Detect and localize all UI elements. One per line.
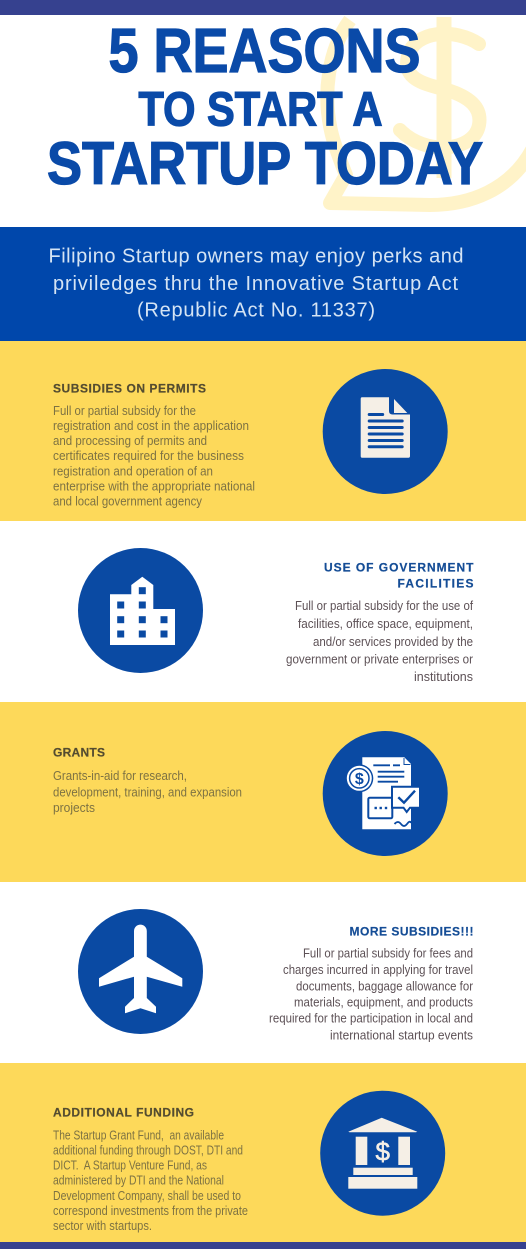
body text: additional funding xyxy=(53,1128,248,1233)
body text: additional funding: administered by DTI and the National xyxy=(53,1174,224,1188)
body text: subsidies on permits: certificates required for the business xyxy=(53,448,244,463)
body text: more subsidies: documents, baggage allowance for xyxy=(296,978,474,993)
body text: subsidies on permits xyxy=(53,403,255,508)
body text: additional funding: sector with startups. xyxy=(53,1219,152,1233)
title panel xyxy=(0,15,526,227)
body text: subsidies on permits: registration and cost in the application xyxy=(53,418,249,433)
panel: more subsidies xyxy=(0,882,526,1063)
body text: additional funding: correspond investments from the private xyxy=(53,1204,248,1218)
decorative dollar coin icon xyxy=(327,17,526,205)
heading: use of government facilities: USE OF GOVERNMENT xyxy=(324,560,474,574)
body text: subsidies on permits: enterprise with the appropriate national xyxy=(53,478,255,494)
subtitle text: (Republic Act No. 11337) xyxy=(137,300,375,322)
heading: use of government facilities xyxy=(324,560,474,590)
bottom band xyxy=(0,1242,526,1249)
panel: additional funding xyxy=(0,1063,526,1242)
body text: subsidies on permits: and local government agency xyxy=(53,494,202,508)
icon: bank xyxy=(320,1091,445,1216)
title: 5 REASONS xyxy=(108,17,420,86)
body text: additional funding: DICT. A Startup Venture Fund, as xyxy=(53,1159,207,1173)
body text: additional funding: additional funding through DOST, DTI and xyxy=(53,1143,243,1157)
title: TO START A xyxy=(138,84,382,136)
body text: use of government facilities: facilities, office space, equipment, xyxy=(298,616,473,631)
body text: additional funding: Development Company, shall be used to xyxy=(53,1189,241,1203)
body text: grants: development, training, and expansion xyxy=(53,784,242,800)
heading: more subsidies: MORE SUBSIDIES!!! xyxy=(350,924,474,938)
body text: more subsidies: charges incurred in applying for travel xyxy=(283,962,473,977)
body text: subsidies on permits: Full or partial subsidy for the xyxy=(53,403,196,418)
title xyxy=(47,17,483,197)
body text: grants xyxy=(53,768,242,815)
icon: grant documents: $ xyxy=(355,771,364,788)
heading: subsidies on permits: SUBSIDIES ON PERMITS xyxy=(53,382,206,396)
body text: more subsidies: Full or partial subsidy for fees and xyxy=(303,945,473,960)
heading: grants: GRANTS xyxy=(53,746,105,760)
body text: more subsidies: international startup events xyxy=(330,1027,473,1042)
body text: subsidies on permits: registration and operation of an xyxy=(53,464,213,478)
icon: bank: $ xyxy=(375,1136,390,1166)
subtitle text: Filipino Startup owners may enjoy perks and xyxy=(48,246,464,268)
subtitle banner xyxy=(0,227,526,341)
body text: use of government facilities xyxy=(286,598,474,684)
body text: more subsidies xyxy=(269,945,474,1042)
body text: grants: projects xyxy=(53,800,95,815)
icon: building xyxy=(78,548,203,673)
body text: use of government facilities: institutions xyxy=(414,669,473,684)
body text: use of government facilities: government or private enterprises or xyxy=(286,652,474,666)
panel: use of government facilities xyxy=(0,521,526,702)
top band xyxy=(0,0,526,15)
heading: additional funding: ADDITIONAL FUNDING xyxy=(53,1106,194,1120)
body text: use of government facilities: Full or partial subsidy for the use of xyxy=(295,598,473,613)
body text: additional funding: The Startup Grant Fund, an available xyxy=(53,1128,224,1142)
body text: more subsidies: materials, equipment, and products xyxy=(294,995,473,1010)
heading: use of government facilities: FACILITIES xyxy=(398,576,474,590)
body text: more subsidies: required for the participation in local and xyxy=(269,1011,473,1026)
subtitle text: priviledges thru the Innovative Startup Act xyxy=(53,273,458,295)
panel: grants xyxy=(0,702,526,882)
subtitle text xyxy=(48,246,464,322)
body text: grants: Grants-in-aid for research, xyxy=(53,768,187,783)
icon: document xyxy=(323,369,448,494)
body text: subsidies on permits: and processing of permits and xyxy=(53,433,207,448)
icon: airplane xyxy=(78,909,203,1034)
icon: grant documents xyxy=(323,731,448,856)
body text: use of government facilities: and/or services provided by the xyxy=(313,634,473,649)
panel: subsidies on permits xyxy=(0,341,526,521)
